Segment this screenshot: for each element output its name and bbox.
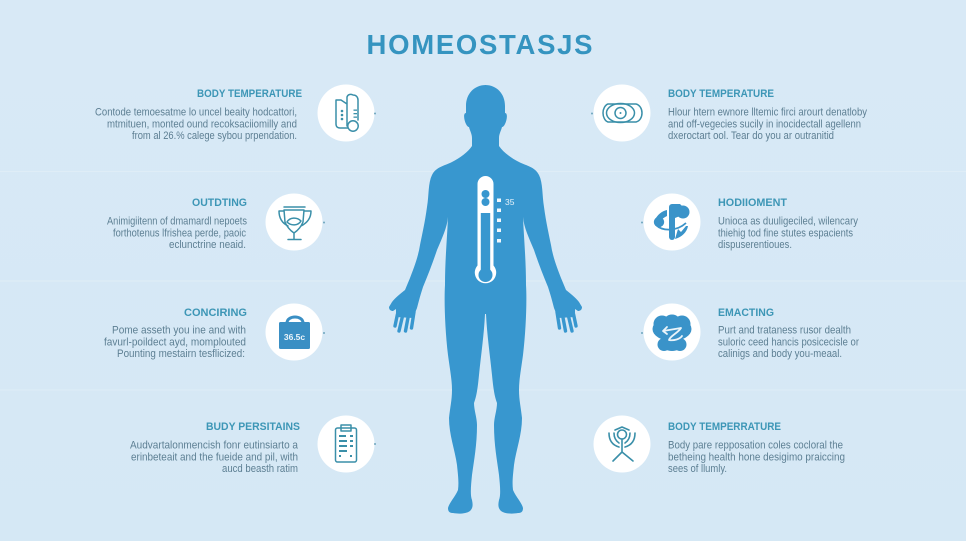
icon: figure with raised arms <box>594 416 650 472</box>
thermometer: 35 <box>505 197 515 207</box>
text block: forthotenus lfrishea perde, paoic <box>113 228 247 240</box>
text block: Audvartalonmencish fonr eutinsiarto a <box>130 440 298 452</box>
text block: dxeroctart ool. Tear do you ar outranitid <box>668 130 834 142</box>
panel: left 2 outdting <box>107 194 325 251</box>
icon: eye <box>591 84 650 142</box>
heading: CONCIRING <box>184 307 247 319</box>
text block <box>130 440 298 475</box>
panel: right 4 body temperrature <box>594 416 845 475</box>
text block: Pome asseth you ine and with <box>112 324 246 336</box>
text block: Hlour htern ewnore lltemic firci arourt denatloby <box>668 106 868 118</box>
panel: left 3 conciring <box>104 304 325 360</box>
text block: Purt and trataness rusor dealth <box>718 324 851 336</box>
text block: favurl-poildect ayd, momplouted <box>104 336 246 348</box>
icon: device with gauge <box>318 84 376 142</box>
heading: OUTDTING <box>192 197 247 209</box>
text block: dispuserentioues. <box>718 239 792 251</box>
panel: right 3 emacting <box>641 304 859 360</box>
text block <box>107 216 248 251</box>
text block: thiehig tod fine stutes espacients <box>718 228 854 240</box>
title: HOMEOSTASJS <box>366 29 592 60</box>
heading: EMACTING <box>718 307 774 319</box>
text block: sees of llumly. <box>668 463 727 475</box>
text block <box>718 216 859 251</box>
text block <box>104 324 246 360</box>
heading: BUDY PERSITAINS <box>206 421 300 433</box>
text block: from al 26.% calege sybou prpendation. <box>132 130 297 142</box>
text block <box>95 106 297 142</box>
panel: right 1 body temperature <box>591 84 868 142</box>
text block: eclunctrine neaid. <box>169 239 246 251</box>
text block: Pounting mestairn tesflicized: <box>117 348 245 360</box>
text block: and off-vegecies sucily in inocidectall agellenn <box>668 118 861 130</box>
icon: bag with temperature <box>266 304 325 360</box>
heading: BODY TEMPERATURE <box>197 88 302 100</box>
icon: bag with temperature: 36.5c <box>284 332 305 342</box>
text block: suloric ceed hancis posicecisle or <box>718 336 859 348</box>
text block: Body pare repposation coles cocloral the <box>668 440 843 452</box>
thermometer <box>475 176 515 283</box>
text block: mtmituen, monted ound recoksaciiomilly and <box>107 118 297 130</box>
heading: BODY TEMPERRATURE <box>668 421 781 433</box>
icon: trophy <box>266 194 325 250</box>
text block <box>668 440 845 475</box>
heading: BODY TEMPERATURE <box>668 88 774 100</box>
text block: Contode temoesatme lo uncel beaity hodcattori, <box>95 106 297 118</box>
text block: Animigiitenn of dmamardl nepoets <box>107 216 248 228</box>
text block: Unioca as duuligeciled, wilencary <box>718 216 859 228</box>
human body silhouette <box>389 85 582 514</box>
panel: right 2 hodiioment <box>641 194 859 251</box>
icon: organ with arrows <box>641 194 700 250</box>
text block: calinigs and body you-meaal. <box>718 348 842 360</box>
icon: clipboard <box>318 416 376 472</box>
panel: left 4 body persitains <box>130 416 376 475</box>
panel: left 1 body temperature <box>95 84 376 142</box>
text block <box>718 324 859 360</box>
heading: HODIIOMENT <box>718 197 787 209</box>
text block <box>668 106 868 142</box>
text block: erinbeteait and the fueide and pil, with <box>131 452 298 464</box>
icon: cloud with arrows <box>641 304 700 360</box>
text block: aucd beasth ratim <box>222 463 298 475</box>
text block: betheing health hone desigimo praiccing <box>668 452 845 464</box>
